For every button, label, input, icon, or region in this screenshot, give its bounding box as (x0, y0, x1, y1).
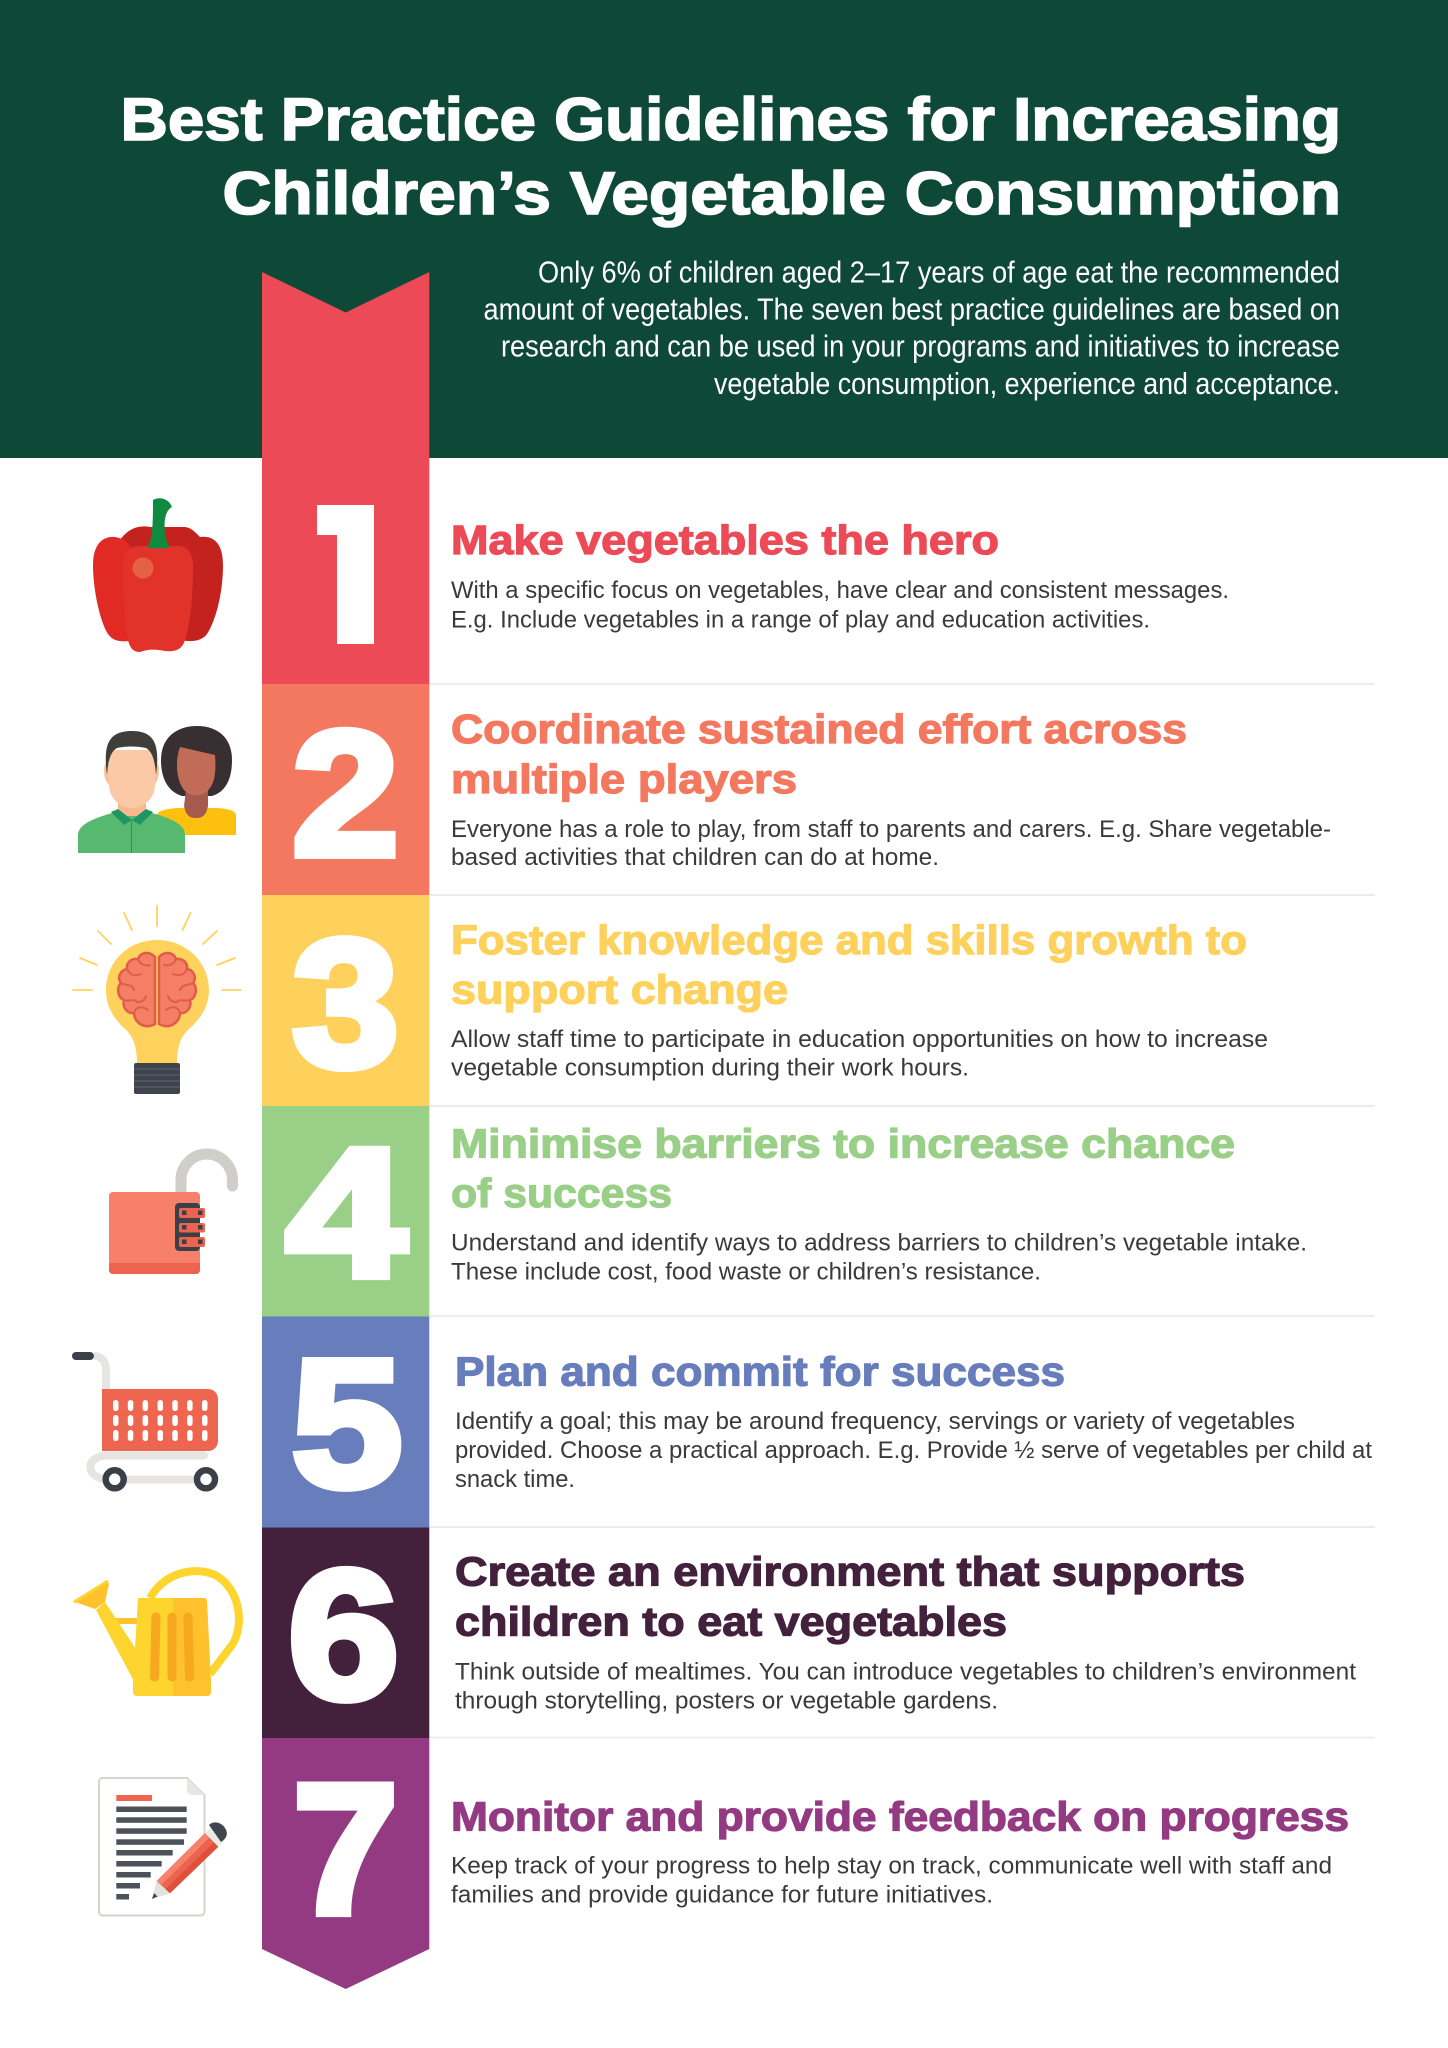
step 5 text: provided. Choose a practical approach. E.g. Provide ½ serve of vegetables per child at (455, 1437, 1372, 1464)
step 3 text (451, 917, 1268, 1082)
step 2 text: Coordinate sustained effort across (451, 706, 1187, 752)
step 5 text: Identify a goal; this may be around frequency, servings or variety of vegetables (455, 1408, 1295, 1435)
icon: open combination padlock (109, 1154, 232, 1274)
step 1 text: Make vegetables the hero (451, 517, 999, 563)
segment 4: 4 (286, 1110, 406, 1315)
step 2 text: multiple players (451, 756, 797, 802)
step 3 text: Foster knowledge and skills growth to (451, 917, 1247, 963)
step 7 text: Monitor and provide feedback on progress (451, 1794, 1349, 1840)
step 4 text: Minimise barriers to increase chance (451, 1120, 1235, 1166)
step 7 text: Keep track of your progress to help stay on track, communicate well with staff and (451, 1852, 1332, 1880)
step 5 text: Plan and commit for success (455, 1348, 1065, 1394)
step 3 text: support change (451, 966, 788, 1012)
step 2 text: based activities that children can do at home. (451, 844, 939, 871)
header band (0, 0, 1448, 458)
intro text (484, 254, 1340, 401)
step 7 text (451, 1794, 1349, 1908)
segment 6: 6 (288, 1532, 399, 1737)
step 4 text: of success (451, 1170, 672, 1216)
segment 5 (262, 1316, 429, 1528)
segment 3: 3 (292, 902, 399, 1105)
step 6 text: Create an environment that supports (455, 1548, 1245, 1594)
segment 1 (262, 272, 429, 684)
intro text: Only 6% of children aged 2–17 years of age eat the recommended (538, 254, 1340, 290)
icon: document and pencil (99, 1778, 227, 1916)
step 6 text: Think outside of mealtimes. You can introduce vegetables to children’s environment (455, 1658, 1356, 1686)
segment 7 (262, 1738, 429, 1989)
step 3 text: vegetable consumption during their work hours. (451, 1054, 969, 1082)
segment 2 (262, 684, 429, 895)
step 5 text (455, 1348, 1372, 1493)
icon: two people (78, 726, 236, 853)
title (120, 86, 1341, 227)
step 6 text: children to eat vegetables (455, 1598, 1007, 1644)
step 6 text (455, 1548, 1356, 1714)
intro text: amount of vegetables. The seven best practice guidelines are based on (484, 292, 1340, 326)
segment 5: 5 (292, 1322, 402, 1525)
title: Children’s Vegetable Consumption (222, 160, 1341, 227)
step 4 text: These include cost, food waste or children’s resistance. (451, 1258, 1041, 1286)
icon: watering can (75, 1571, 239, 1696)
step 1 text: E.g. Include vegetables in a range of play and education activities. (451, 606, 1150, 634)
step 5 text: snack time. (455, 1466, 575, 1493)
segment 7: 7 (293, 1746, 398, 1953)
segment 6 (262, 1528, 429, 1738)
title: Best Practice Guidelines for Increasing (120, 86, 1341, 153)
step 6 text: through storytelling, posters or vegetable gardens. (455, 1688, 998, 1714)
intro text: research and can be used in your programs and initiatives to increase (501, 328, 1340, 364)
icon: light bulb with brain (73, 906, 241, 1094)
ribbon with numbered segments (262, 272, 429, 1989)
step 4 text: Understand and identify ways to address barriers to children’s vegetable intake. (451, 1230, 1307, 1256)
step 1 text (451, 517, 1229, 634)
segment 3 (262, 895, 429, 1106)
step 3 text: Allow staff time to participate in education opportunities on how to increase (451, 1026, 1268, 1053)
icon: shopping trolley (72, 1352, 218, 1488)
step 1 text: With a specific focus on vegetables, have clear and consistent messages. (451, 577, 1229, 604)
segment 2: 2 (292, 695, 399, 893)
step 7 text: families and provide guidance for future initiatives. (451, 1882, 993, 1908)
intro text: vegetable consumption, experience and acceptance. (714, 366, 1340, 401)
step 4 text (451, 1120, 1307, 1286)
step 2 text (451, 706, 1331, 871)
segment 1: 1 (300, 479, 400, 678)
icon: red capsicum (93, 498, 223, 652)
step 2 text: Everyone has a role to play, from staff to parents and carers. E.g. Share vegetable- (451, 816, 1331, 843)
